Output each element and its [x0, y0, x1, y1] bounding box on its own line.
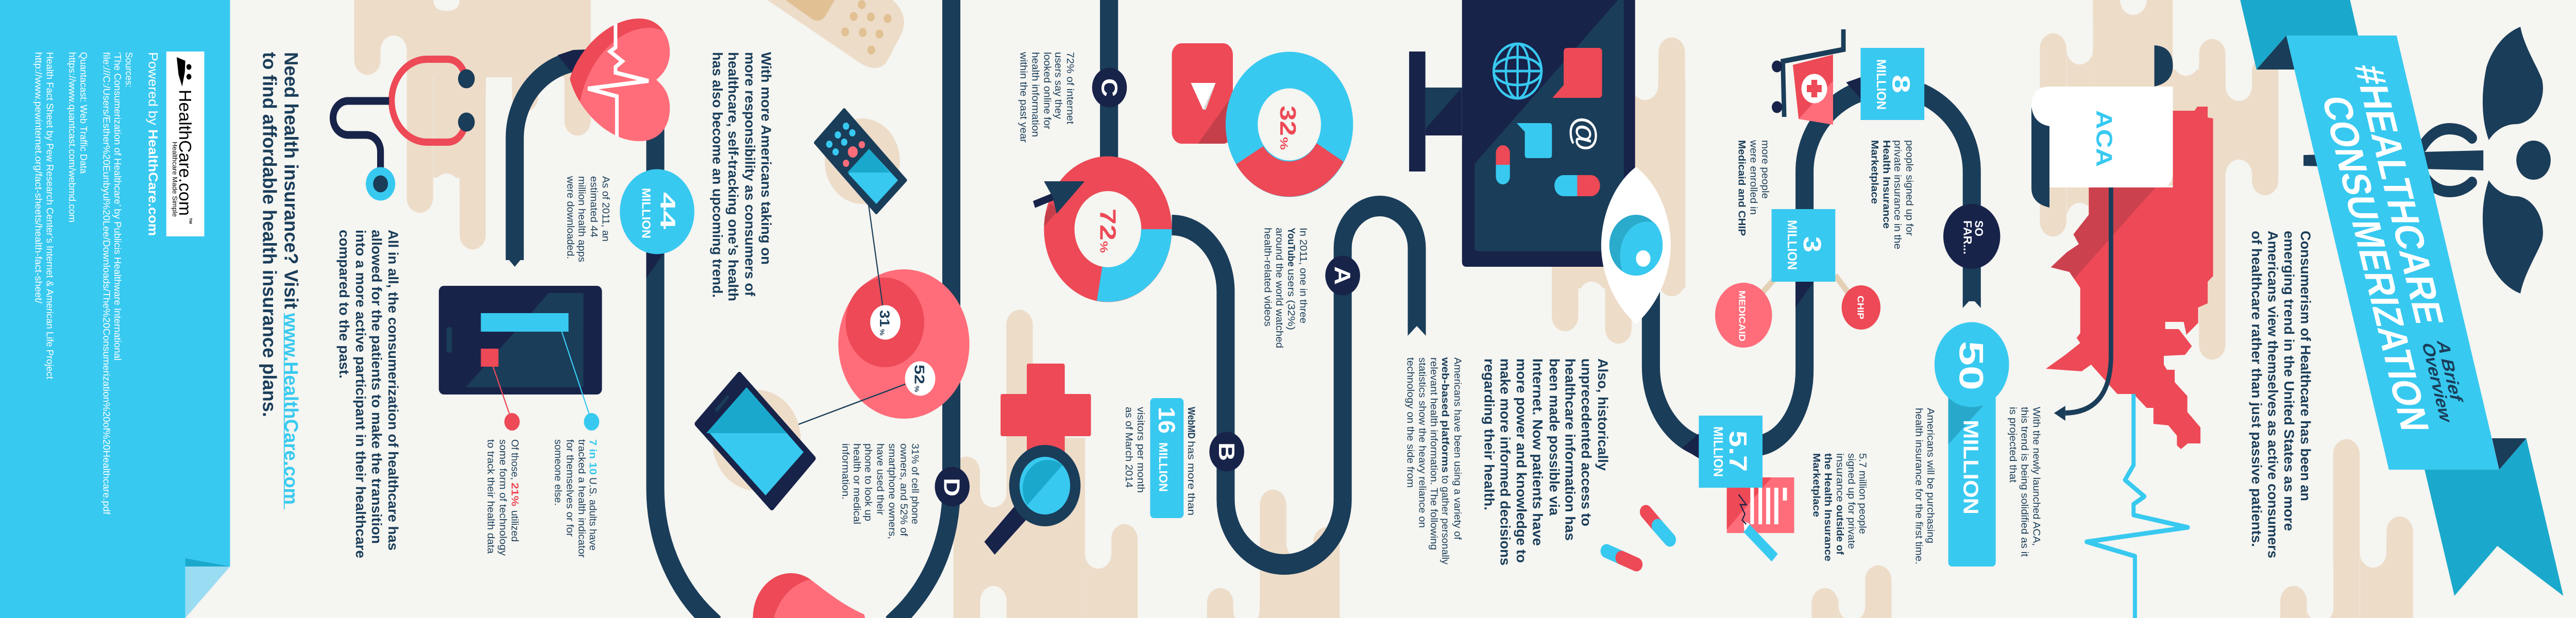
- badge C: C: [1097, 78, 1123, 97]
- text: web-based platforms: statistics show the heavy reliance on: [1417, 357, 1428, 528]
- sources list: https://www.quantcast.com/webmd.com: [67, 52, 77, 222]
- text: YouTube users: users (32%): [1285, 269, 1297, 330]
- icon: tablet: [697, 374, 814, 508]
- stat: 44 million badge: MILLION: [639, 188, 652, 238]
- text: 7 in 10 adults: [553, 439, 598, 558]
- call to action heading: [259, 52, 301, 509]
- badge B: [1209, 432, 1244, 472]
- sources list: Quantacast: Web Traffic Data: [78, 52, 89, 174]
- text: outside marketplace: outside of: [1834, 505, 1845, 555]
- chart: red USA map: [2046, 107, 2213, 449]
- intro paragraph: Americans view themselves as active consumers: [2265, 231, 2280, 558]
- chip circle: CHIP: [1856, 296, 1866, 319]
- text: apps downloaded: [565, 176, 611, 262]
- text: cell phone owners: 31% of cell phone: [910, 443, 921, 524]
- text: medicaid enrollment: were enrolled in: [1748, 140, 1759, 215]
- chart: 32% donut: [1236, 70, 1344, 197]
- logo box: HealthCare.com: [176, 90, 195, 216]
- pill vertical: [1496, 145, 1510, 184]
- text: 7 in 10 adults: tracked a health indicator: [576, 439, 587, 558]
- text: newly launched ACA: is projected that: [2007, 407, 2019, 483]
- section paragraph: unprecedented access: healthcare information has: [1562, 358, 1578, 541]
- text: private insurance: Marketplace: [1869, 140, 1880, 204]
- text: web-based platforms: Americans have been using a variety of: [1452, 357, 1463, 540]
- text: outside marketplace: Marketplace: [1811, 453, 1822, 517]
- stat: 44 million badge: 44: [656, 192, 679, 229]
- stat box: 3 million: 3: [1799, 236, 1826, 252]
- badge: so far: SO: [1973, 220, 1985, 236]
- text: outside marketplace: [1811, 453, 1868, 561]
- text: internet users: looked online for: [1042, 52, 1053, 129]
- section paragraph: self-tracking: [709, 52, 773, 301]
- text: apps downloaded: were downloaded.: [565, 176, 576, 259]
- text: web-based platforms: web-based platforms: [1439, 357, 1451, 473]
- title text: [2313, 65, 2452, 431]
- section paragraph: self-tracking: has also become an upcoming trend.: [709, 52, 725, 298]
- navy route tubes: [506, 0, 1981, 618]
- stat: WebMD 16 million: visitors per month: [1135, 407, 1146, 493]
- icon: smartphone with bars: [439, 286, 602, 431]
- section paragraph: unprecedented access: been made possible via: [1546, 358, 1562, 516]
- chart: 72% donut with cursor: 72: [1095, 209, 1121, 241]
- badge: so far: [1943, 204, 2000, 269]
- beige background blobs: [354, 0, 2400, 618]
- text: YouTube users: around the world watched: [1274, 228, 1285, 348]
- cursor arrow: [1034, 181, 1084, 214]
- text: YouTube users: In 2011, one in three: [1298, 228, 1309, 323]
- text: internet users: users say they: [1053, 52, 1064, 119]
- text: apps downloaded: estimated 44: [588, 176, 599, 237]
- text: internet users: [1018, 52, 1076, 143]
- text: YouTube users: [1262, 228, 1309, 348]
- stat: WebMD 16 million: WebMD: [1185, 407, 1197, 439]
- stat: WebMD 16 million: MILLION: [1156, 442, 1170, 492]
- text: apps downloaded: million health apps: [576, 176, 587, 262]
- sources list: file:///C:/Users/Esther%20Eunbyul%20Lee/Downloads/The%20Consumerization%20of%20Healthcare.pdf: [101, 52, 111, 514]
- subtitle text: Overview: [2418, 343, 2455, 422]
- text: americans purchasing: Americans will be purchasing: [1925, 408, 1936, 543]
- intro paragraph: [2249, 231, 2313, 558]
- section paragraph: unprecedented access: unprecedented access to: [1579, 358, 1594, 526]
- call to action heading: www.HealthCare.com: [280, 313, 301, 505]
- text: 7 in 10 adults: 7 in 10: [587, 439, 598, 475]
- ACA scroll: ACA: [2092, 110, 2117, 167]
- intro paragraph: Consumerism of Healthcare has been an: [2297, 231, 2313, 501]
- red speech bubble: [1552, 48, 1602, 98]
- text: cell phone owners: owners, and 52% of: [899, 443, 909, 536]
- text: cell phone owners: health or medical: [851, 443, 862, 524]
- section paragraph: self-tracking: more responsibility as consumers of: [742, 52, 757, 296]
- badge: so far: FAR...: [1961, 220, 1974, 254]
- text: internet users: 72% of internet: [1064, 52, 1076, 124]
- badge A: [1325, 255, 1360, 296]
- pill horizontal: [1554, 175, 1600, 196]
- logo box: Healthcare Made Simple: [171, 142, 179, 217]
- icon: stethoscope: [333, 59, 474, 201]
- icon: contract with pen: [1727, 477, 1794, 558]
- blue speech bubble: [1517, 123, 1552, 158]
- stat: WebMD 16 million: has more than: [1185, 441, 1197, 516]
- title ribbon: [2240, 0, 2563, 596]
- sources list: ‘The Consumerization of Healthcare’ by Publicis Healthware International: [112, 52, 123, 360]
- text: private insurance: people signed up for: [1904, 140, 1915, 236]
- chart: 72% donut with cursor: [1034, 174, 1172, 302]
- stat box: 8 million: MILLION: [1874, 59, 1888, 110]
- badge B: B: [1214, 442, 1240, 461]
- text: outside marketplace: the Health Insurance: [1822, 453, 1834, 561]
- stat: WebMD 16 million: [1123, 398, 1197, 518]
- text: internet users: health information: [1030, 52, 1041, 137]
- chart: 72% donut with cursor: %: [1098, 241, 1110, 253]
- stat box: 8 million: [1860, 48, 1924, 120]
- closing paragraph: allowed for the patients to make the transition: [368, 230, 384, 544]
- logo box: TM: [189, 218, 193, 224]
- 31 percent label: %: [878, 329, 886, 336]
- powered by line: [146, 52, 161, 236]
- at sign: @: [1568, 116, 1603, 151]
- section paragraph: unprecedented access: Also, historically: [1595, 358, 1610, 471]
- section paragraph: unprecedented access: more power and knowledge to: [1513, 358, 1529, 563]
- text: YouTube users: YouTube: [1285, 228, 1297, 267]
- text: private insurance: [1869, 140, 1915, 249]
- sources list: Health Fact Sheet by Pew Research Center’s Internet & American Life Project: [44, 52, 55, 379]
- icon: band-aid: [767, 0, 904, 68]
- section paragraph: unprecedented access: [1481, 358, 1610, 565]
- text: of those 21%: [485, 439, 520, 556]
- badge D: [935, 467, 970, 507]
- icon: eye: [1601, 167, 1671, 324]
- text: apps downloaded: As of 2011, an: [600, 176, 611, 242]
- title text: CONSUMERIZATION: [2313, 96, 2438, 431]
- closing paragraph: All in all, the consumerization of healthcare has: [385, 230, 400, 551]
- section paragraph: self-tracking: With more Americans taking on: [758, 52, 773, 265]
- subtitle text: A Brief: [2433, 340, 2466, 402]
- icon: caduceus: [2303, 27, 2551, 294]
- text: newly launched ACA: [2007, 407, 2042, 557]
- text: of those 21%: utilized: [509, 510, 520, 542]
- text: outside marketplace: 5.7 million people: [1857, 453, 1868, 534]
- stat: 50 million ribbon: MILLION: [1959, 420, 1982, 514]
- text: americans purchasing: [1913, 408, 1936, 564]
- text: YouTube users: health-related videos: [1262, 228, 1273, 327]
- section paragraph: unprecedented access: make more informed decisions: [1497, 358, 1513, 565]
- sources list: http://www.pewinternet.org/fact-sheets/health-fact-sheet/: [33, 52, 43, 304]
- call to action heading: to find affordable health insurance plans.: [259, 52, 280, 417]
- closing paragraph: compared to the past.: [336, 230, 352, 379]
- intro paragraph: of healthcare rather than just passive patients.: [2249, 231, 2264, 547]
- stat box: 5.7 million: MILLION: [1711, 426, 1725, 477]
- badge A: A: [1330, 266, 1355, 285]
- section paragraph: unprecedented access: regarding their health.: [1481, 358, 1497, 510]
- sources list: [33, 52, 134, 514]
- blue ECG line: [2087, 394, 2188, 618]
- text: web-based platforms: technology on the side from: [1405, 357, 1416, 488]
- intro paragraph: emerging trend in the United States as more: [2281, 231, 2297, 531]
- text: newly launched ACA: With the newly launched ACA,: [2031, 407, 2042, 546]
- text: of those 21%: 21%: [509, 483, 520, 506]
- icon: pink blob at bottom: [753, 573, 865, 618]
- text: web-based platforms: [1405, 357, 1463, 565]
- stat: WebMD 16 million: as of March 2014: [1123, 407, 1134, 488]
- icon: remote control device: [815, 110, 906, 213]
- powered by line: Powered by: [146, 52, 161, 125]
- 52 percent label: 52: [911, 365, 927, 384]
- text: private insurance: private insurance in the: [1892, 140, 1903, 249]
- icon: video play button: [1172, 43, 1233, 144]
- ACA scroll: [2031, 45, 2173, 208]
- closing paragraph: into a more active participant in their healthcare: [353, 230, 368, 558]
- 52 percent label: [905, 362, 935, 396]
- text: web-based platforms: relevant health information. The following: [1429, 357, 1439, 550]
- stat: WebMD 16 million: 16: [1154, 407, 1179, 434]
- title text: #HEALTHCARE: [2346, 65, 2452, 324]
- text: cell phone owners: [840, 443, 921, 539]
- text: outside marketplace: insurance: [1834, 453, 1845, 502]
- text: medicaid enrollment: Medicaid and CHIP: [1736, 140, 1747, 236]
- text: 7 in 10 adults: for themselves or for: [564, 439, 575, 537]
- text: cell phone owners: smartphone owners,: [887, 443, 897, 539]
- text: cell phone owners: information.: [840, 443, 851, 500]
- text: medicaid enrollment: [1736, 140, 1771, 236]
- icon: heart with ECG line: [570, 19, 670, 141]
- chart: 32% donut: 32: [1276, 106, 1301, 136]
- chart: 31% and 52% nested circles: [799, 205, 970, 424]
- stat box: 3 million: [1772, 209, 1835, 282]
- text: medicaid enrollment: more people: [1760, 140, 1771, 199]
- section paragraph: unprecedented access: Internet. Now patients have: [1530, 358, 1545, 546]
- text: 7 in 10 adults: someone else.: [553, 439, 564, 506]
- text: 7 in 10 adults: U.S. adults have: [587, 477, 598, 551]
- medicaid circle: MEDICAID: [1737, 290, 1747, 341]
- text: cell phone owners: have used their: [875, 443, 886, 515]
- call to action heading: Need health insurance? Visit: [280, 52, 301, 309]
- stat: 50 million ribbon: 50: [1953, 341, 1990, 390]
- closing paragraph: [336, 230, 400, 558]
- stat box: 3 million: MILLION: [1785, 220, 1800, 270]
- badge C: [1092, 68, 1127, 107]
- text: web-based platforms: to gather personally: [1439, 475, 1451, 565]
- footer panel: sources and credit: [0, 0, 230, 618]
- icon: loose pills: [1606, 512, 1670, 564]
- stat box: 5.7 million: 5.7: [1724, 431, 1752, 472]
- arrow from map: [2054, 187, 2111, 421]
- globe icon: [1494, 44, 1541, 98]
- text: of those 21%: Of those,: [509, 439, 520, 480]
- badge D: D: [939, 478, 965, 496]
- chart: 32% donut: %: [1278, 137, 1290, 150]
- stat: 50 million ribbon: [1935, 322, 2009, 566]
- text: private insurance: Health Insurance: [1881, 140, 1892, 229]
- text: of those 21%: to track their health data: [485, 439, 496, 554]
- stat: 44 million badge: [620, 169, 694, 254]
- medicaid circle: [1715, 283, 1772, 348]
- text: outside marketplace: signed up for private: [1846, 453, 1857, 549]
- 31 percent label: [870, 305, 901, 340]
- powered by line: HealthCare.com: [146, 129, 161, 236]
- logo box: [166, 52, 204, 236]
- text: of those 21%: some form of technology: [498, 439, 509, 556]
- text: americans purchasing: health insurance for the first time.: [1913, 408, 1924, 564]
- text: cell phone owners: phone to look up: [862, 443, 874, 521]
- chip circle: [1842, 285, 1880, 330]
- connectors and medicaid chip circles: [1715, 276, 1880, 348]
- stat box: 8 million: 8: [1887, 75, 1916, 93]
- section paragraph: self-tracking: healthcare, self-tracking one’s health: [725, 52, 740, 301]
- text: internet users: within the past year: [1018, 52, 1029, 143]
- stat box: 5.7 million: [1699, 416, 1762, 488]
- sources list: Sources:: [123, 52, 134, 88]
- 31 percent label: 31: [876, 310, 892, 327]
- text: newly launched ACA: this trend is being solidified as it: [2019, 407, 2030, 557]
- 52 percent label: %: [913, 386, 921, 392]
- icon: shopping cart with medical cross: [1772, 29, 1843, 125]
- icon: monitor: [1409, 0, 1635, 267]
- icon: medical cross with magnifier: [985, 364, 1091, 555]
